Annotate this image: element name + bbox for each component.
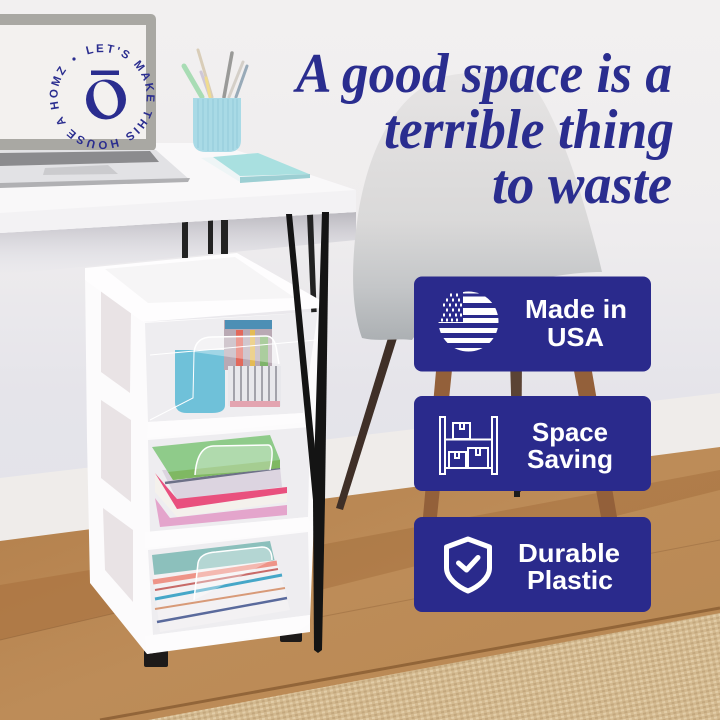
circular slogan: LET'S MAKE THIS HOUSE A HOMZ xyxy=(50,44,155,150)
stacked books xyxy=(153,560,290,632)
cup body xyxy=(193,98,241,152)
brand badge xyxy=(50,44,155,150)
label: durable: Durable xyxy=(518,538,620,568)
notebook xyxy=(201,153,310,183)
drawer 1 xyxy=(145,312,318,438)
headline xyxy=(293,43,674,216)
slogan dot xyxy=(72,57,76,61)
pencil cup xyxy=(184,50,247,152)
headline: to waste xyxy=(492,154,672,216)
laptop base xyxy=(0,150,190,187)
pink books xyxy=(155,473,287,517)
chair legs xyxy=(336,328,617,517)
drawer 3 xyxy=(145,532,310,654)
label: made in: Made in xyxy=(525,294,627,324)
icon: shelves with boxes xyxy=(440,417,497,474)
badge: made in USA xyxy=(414,276,651,372)
chair xyxy=(336,72,617,517)
drawer 2 handle xyxy=(195,445,272,475)
drawer unit xyxy=(85,253,320,667)
teal book xyxy=(152,541,275,582)
label: saving: Saving xyxy=(527,444,613,474)
body frame xyxy=(85,272,318,654)
laptop screen xyxy=(0,14,156,151)
label: USA: USA xyxy=(547,322,604,352)
desk top xyxy=(0,143,356,233)
grey books xyxy=(162,467,282,500)
feet xyxy=(144,628,302,667)
logo bar xyxy=(91,70,119,75)
jute rug xyxy=(148,613,720,720)
pencils xyxy=(184,50,247,97)
drawer 1 handle xyxy=(194,336,279,364)
icon: US flag globe xyxy=(438,291,499,352)
drawer 3 handle xyxy=(194,547,272,600)
badge: durable plastic xyxy=(414,517,651,612)
logo ring xyxy=(86,78,126,120)
top lid xyxy=(85,253,320,322)
pen cup in drawer xyxy=(175,350,225,413)
drawer 2 xyxy=(145,427,312,548)
chair shell xyxy=(353,72,602,340)
desk legs behind xyxy=(182,214,320,400)
label: plastic: Plastic xyxy=(527,565,613,595)
headline: terrible thing xyxy=(384,99,674,161)
label: space: Space xyxy=(532,417,608,447)
icon: shield with check xyxy=(446,539,490,591)
green books xyxy=(152,435,280,480)
headline: A good space is a xyxy=(293,43,672,105)
laptop xyxy=(0,14,190,188)
wood floor xyxy=(0,447,720,720)
side windows xyxy=(101,290,133,602)
desk legs front xyxy=(286,212,329,653)
badge: space saving xyxy=(414,396,651,491)
markers xyxy=(224,320,281,407)
baseboard xyxy=(0,393,720,541)
